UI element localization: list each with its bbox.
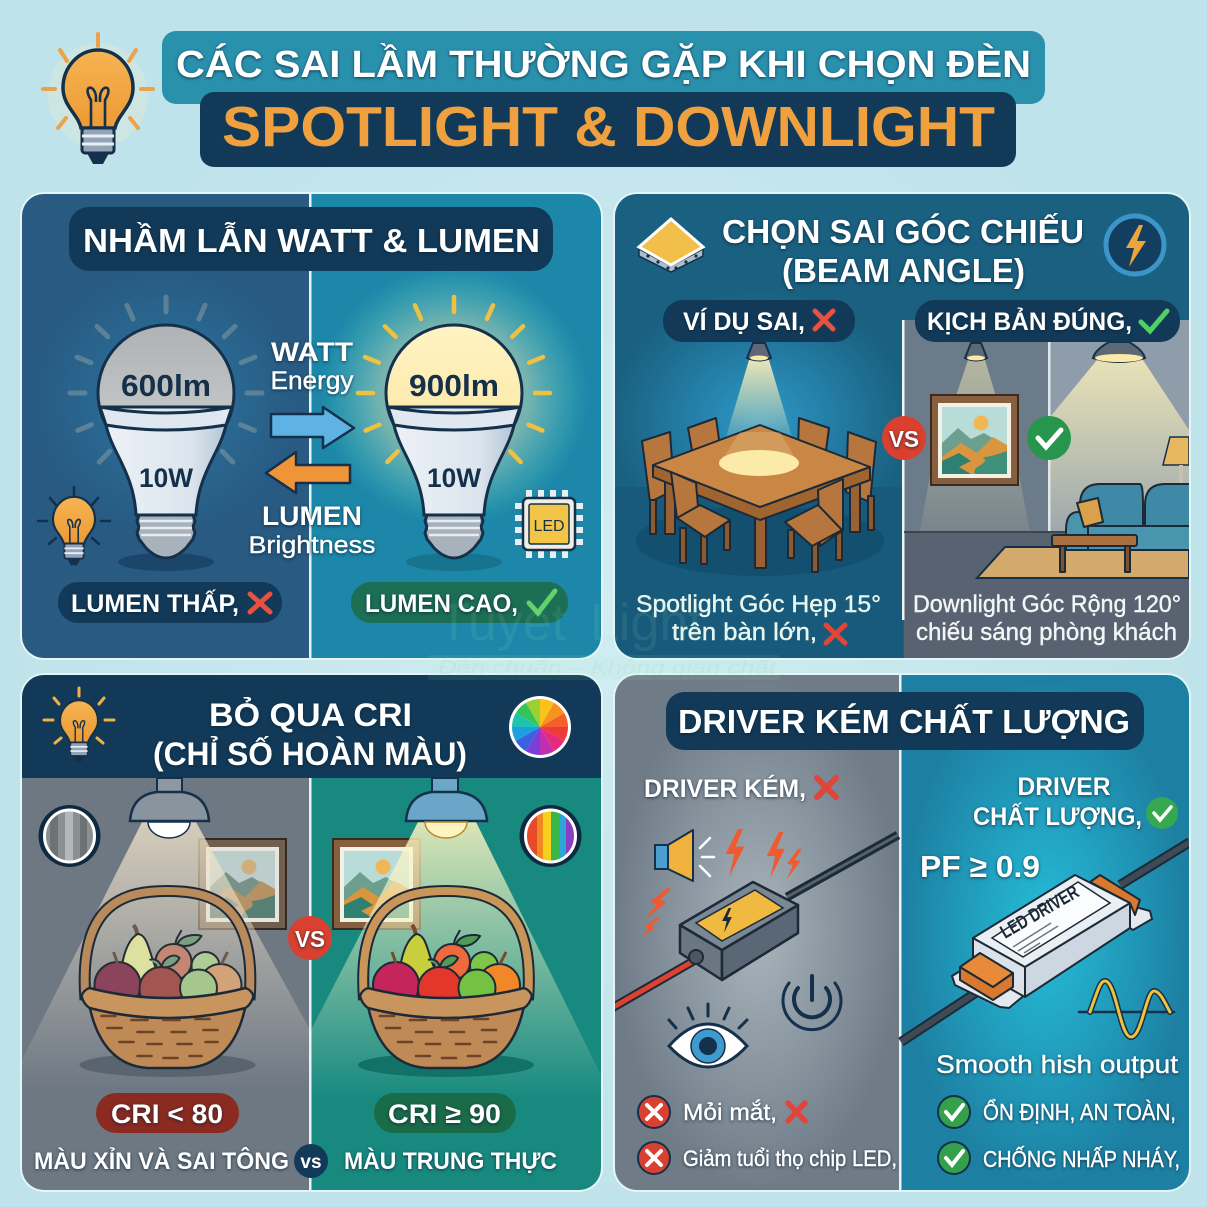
- panel: ignoring CRI: [20, 673, 603, 1192]
- heading: beam angle: CHỌN SAI GÓC CHIẾU: [722, 213, 1084, 250]
- caption: wrong scene: trên bàn lớn,: [672, 619, 817, 646]
- title banner: spotlight and downlight: SPOTLIGHT & DOWNLIGHT: [222, 95, 995, 159]
- heading: beam angle: (BEAM ANGLE): [782, 252, 1025, 289]
- badge: CRI at least 90: [374, 1093, 516, 1133]
- badge: CRI below 80: [96, 1093, 239, 1133]
- icon: sine wave: [1079, 981, 1174, 1037]
- illustration: LED driver: [901, 842, 1190, 1042]
- high lumen bulb: 10W: [427, 463, 481, 493]
- heading: CRI: (CHỈ SỐ HOÀN MÀU): [153, 736, 467, 772]
- table: [653, 425, 870, 568]
- label: smooth output: Smooth hish output: [936, 1051, 1178, 1079]
- badge: CRI at least 90: CRI ≥ 90: [388, 1099, 501, 1129]
- badge: correct scenario: KỊCH BẢN ĐÚNG,: [927, 306, 1132, 336]
- list: quality driver benefits: [938, 1096, 1180, 1174]
- icon: gray swatch: [38, 805, 100, 867]
- captions: CRI comparison: MÀU XỈN VÀ SAI TÔNG: [34, 1146, 289, 1175]
- list: poor driver effects: Mỏi mắt,: [683, 1099, 777, 1125]
- label: Lumen Brightness: [248, 501, 376, 559]
- basket: true colours: [358, 891, 534, 1077]
- label: Lumen Brightness: Brightness: [248, 532, 376, 559]
- floor lamp: [1163, 437, 1189, 485]
- low lumen bulb: 10W: [139, 463, 193, 493]
- beam: [726, 360, 792, 437]
- badge: VS: [288, 916, 332, 960]
- right scene: picture and living room: [920, 342, 1196, 578]
- icon: colour wheel: [509, 696, 571, 758]
- header: [43, 31, 1045, 167]
- caption: wrong scene: Spotlight Góc Hẹp 15°: [636, 591, 881, 618]
- badge: VS: VS: [889, 426, 919, 452]
- icon: green check: [1027, 416, 1071, 460]
- icon: LED chip diamond: [639, 219, 703, 272]
- caption: correct scene: chiếu sáng phòng khách: [916, 619, 1177, 646]
- caption: wrong scene: [636, 591, 881, 646]
- badge: wrong example: [663, 300, 855, 342]
- icon: tired eye: [669, 1004, 747, 1067]
- icon: rainbow swatch: [520, 805, 582, 867]
- low lumen bulb: [70, 297, 262, 571]
- badge: CRI below 80: CRI < 80: [111, 1099, 223, 1129]
- arrow: lumen to left: [266, 452, 350, 493]
- low lumen bulb: 600lm: [121, 368, 211, 403]
- label: poor driver: DRIVER KÉM,: [644, 774, 806, 803]
- label: Watt Energy: [270, 337, 354, 395]
- high lumen bulb: [358, 297, 550, 571]
- lamp: high CRI: [406, 778, 487, 838]
- badge: VS: VS: [295, 926, 325, 952]
- label: Watt Energy: WATT: [271, 337, 354, 367]
- high lumen bulb: 900lm: [409, 368, 499, 403]
- list: quality driver benefits: CHỐNG NHẤP NHÁY,: [983, 1145, 1180, 1172]
- captions: CRI comparison: MÀU TRUNG THỰC: [344, 1147, 557, 1175]
- basket: dull colours: [80, 891, 256, 1077]
- heading: driver: [666, 692, 1144, 750]
- label: PF: PF ≥ 0.9: [920, 849, 1040, 884]
- badge: wrong example: VÍ DỤ SAI,: [683, 307, 805, 336]
- panel: poor quality driver: [612, 673, 1191, 1192]
- label: Watt Energy: Energy: [270, 367, 354, 395]
- right scene background: [904, 320, 1189, 658]
- heading: beam angle: [722, 213, 1084, 289]
- panel: Watt and Lumen confusion: [20, 192, 603, 660]
- icon: energy ring: [1106, 216, 1164, 274]
- lamp: [747, 343, 771, 360]
- back chairs: [642, 418, 876, 534]
- illustration: LED driver: LED DRIVER: [997, 882, 1083, 943]
- watermark: Tuyet: [438, 594, 567, 652]
- lamps: [965, 343, 987, 360]
- icon: bulb: [44, 688, 114, 762]
- heading: CRI: BỎ QUA CRI: [209, 697, 412, 733]
- title banner: common mistakes: [162, 31, 1045, 104]
- heading: Watt and Lumen: [69, 207, 553, 271]
- icon: LED chip: LED: [533, 518, 565, 535]
- illustration: poor driver box: [612, 835, 898, 1008]
- list: quality driver benefits: ỔN ĐỊNH, AN TOÀN,: [983, 1098, 1176, 1125]
- badge: low lumen: LUMEN THẤP,: [71, 589, 239, 618]
- badge: VS: [882, 416, 926, 460]
- icon: small bulb: [38, 487, 110, 565]
- watermark: Đèn chuẩn – Không gian chất: [438, 658, 777, 679]
- badge: low lumen: [58, 582, 282, 623]
- icon: power: [783, 976, 841, 1030]
- badge: correct scenario: [915, 300, 1180, 342]
- body: [973, 938, 1025, 997]
- caption: correct scene: Downlight Góc Rộng 120°: [913, 591, 1181, 618]
- icon: LED chip: [515, 490, 583, 558]
- badge: high lumen: [351, 582, 568, 623]
- title banner: common mistakes: CÁC SAI LẦM THƯỜNG GẶP KHI CHỌN ĐÈN: [176, 42, 1031, 86]
- light beams: [22, 822, 310, 1090]
- icon: speaker noise: [655, 830, 714, 881]
- icon: light bulb: [43, 34, 153, 164]
- label: quality driver: [973, 773, 1178, 831]
- front chairs: [671, 472, 843, 572]
- arrow: watt to right: [271, 407, 354, 448]
- label: Lumen Brightness: LUMEN: [262, 501, 362, 531]
- captions: CRI comparison: [34, 1144, 557, 1178]
- label: quality driver: DRIVER: [1018, 773, 1110, 801]
- icon: sparks: [638, 829, 803, 942]
- label: quality driver: CHẤT LƯỢNG,: [973, 802, 1142, 831]
- heading: driver: DRIVER KÉM CHẤT LƯỢNG: [678, 703, 1130, 740]
- flanges: [1130, 907, 1154, 932]
- rug: [977, 547, 1189, 578]
- lamp: low CRI: [130, 778, 209, 838]
- coffee table: [1052, 535, 1137, 572]
- panel: wrong beam angle: [610, 192, 1196, 660]
- watermark: [428, 594, 780, 680]
- watermark: Light: [590, 594, 703, 652]
- caption: correct scene: [913, 591, 1181, 646]
- sofa: [1066, 484, 1196, 550]
- captions: CRI comparison: vs: [300, 1152, 322, 1173]
- badge: high lumen: LUMEN CAO,: [365, 590, 518, 618]
- heading: Watt and Lumen: NHẦM LẪN WATT & LUMEN: [83, 222, 540, 259]
- terminals: [1090, 875, 1140, 915]
- wrong scene: dining table under narrow spotlight: [636, 343, 884, 576]
- list: poor driver effects: Giảm tuổi thọ chip LED,: [683, 1146, 897, 1171]
- heading: CRI: [153, 697, 467, 772]
- list: poor driver effects: [638, 1096, 897, 1174]
